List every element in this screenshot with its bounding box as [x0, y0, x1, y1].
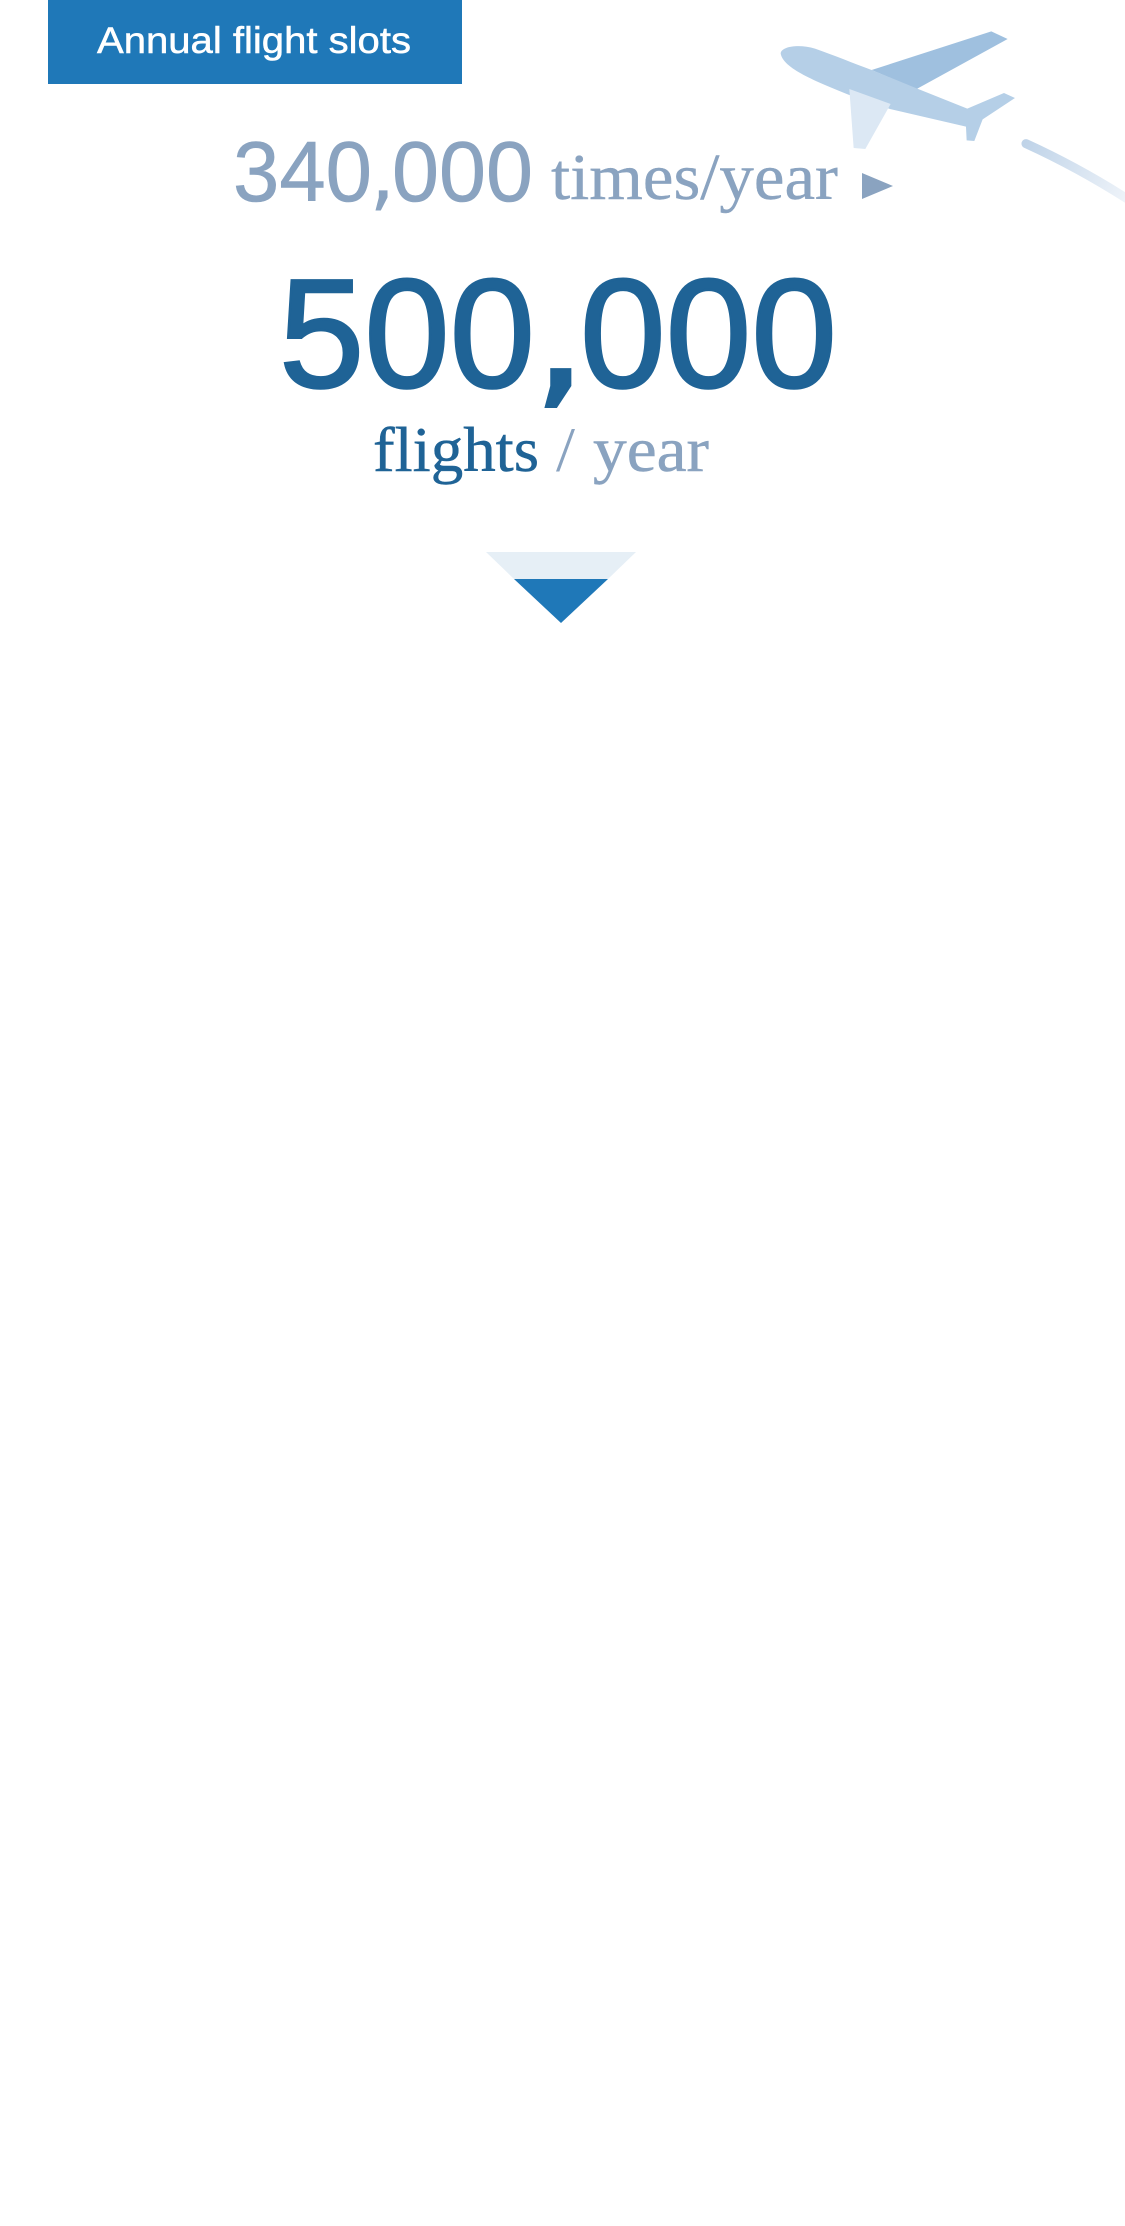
current figure: 340,000 times/year	[233, 123, 838, 221]
target figure: 500,000: ,	[538, 281, 584, 420]
arrow: pointing right to target	[862, 173, 893, 199]
target figure: 500,000: 000	[580, 247, 837, 420]
unit label: flights / year: /	[556, 414, 575, 485]
current figure: 340,000 times/year: 000	[392, 125, 533, 220]
icon: airplane with contrail	[781, 31, 1125, 202]
arrow: downward triangle	[486, 552, 636, 623]
target figure: 500,000: 500	[279, 247, 535, 420]
unit label: flights / year: year	[593, 414, 709, 485]
heading banner: Annual flight slots	[48, 0, 462, 84]
unit label: flights / year	[373, 414, 709, 485]
current figure: 340,000 times/year: 340	[233, 125, 372, 220]
heading banner: Annual flight slots: Annual flight slots	[97, 20, 411, 61]
unit label: flights / year: flights	[373, 414, 539, 485]
current figure: 340,000 times/year: times/year	[551, 141, 838, 214]
current figure: 340,000 times/year: ,	[369, 123, 396, 221]
